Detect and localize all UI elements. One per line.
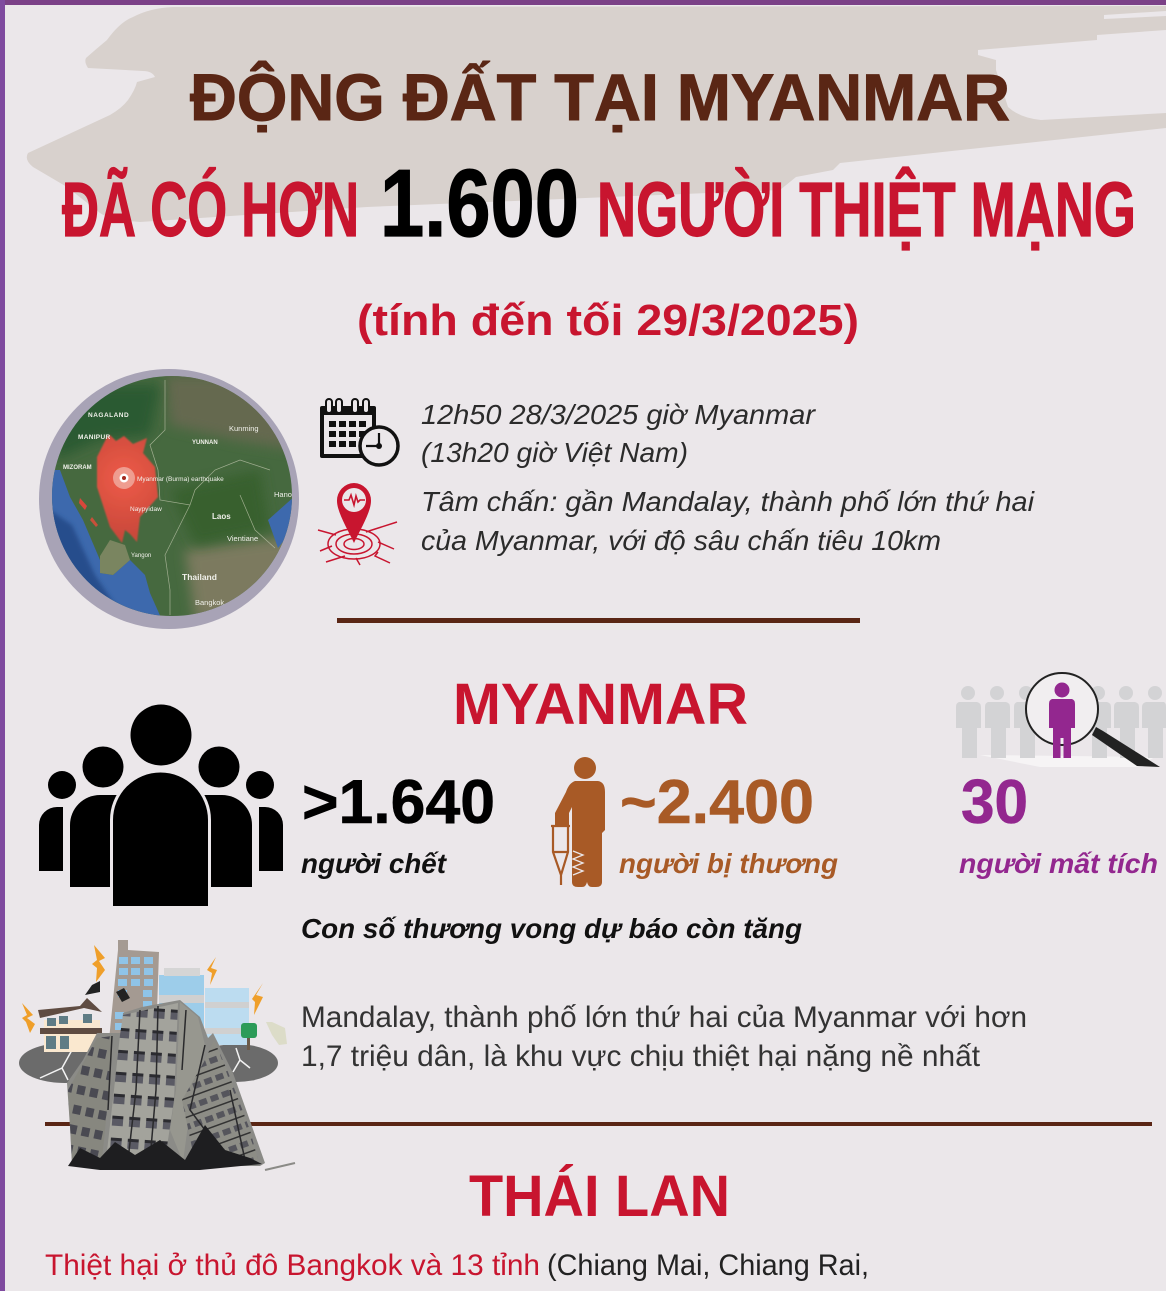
- heading: Myanmar: MYANMAR: [453, 672, 748, 737]
- tall tower: [109, 940, 159, 1040]
- text: Thailand damage: (Chiang Mai, Chiang Rai,: [547, 1249, 869, 1282]
- stat: injured: [619, 768, 838, 879]
- text: Mandalay: 1,7 triệu dân, là khu vực chịu thiệt hại nặng nề nhất: [301, 1040, 981, 1073]
- map of earthquake zone: YUNNAN: [192, 440, 218, 446]
- text: Mandalay: [301, 1001, 1027, 1073]
- text: time of quake: 12h50 28/3/2025 giờ Myanmar: [421, 399, 817, 430]
- title: ĐÃ CÓ HƠN: [62, 166, 359, 253]
- icon: calendar and clock: [320, 399, 398, 465]
- Irrawaddy delta: [100, 540, 130, 575]
- map of earthquake zone: Laos: [212, 512, 231, 521]
- stat: missing: người mất tích: [959, 848, 1158, 879]
- map of earthquake zone: Myanmar (Burma) earthquake: [137, 476, 224, 483]
- icon: epicenter pin: [318, 483, 397, 565]
- stat: deaths: [301, 768, 495, 879]
- blue buildings: [159, 975, 204, 1035]
- text: Thailand damage: Thiệt hại ở thủ đô Bangkok và 13 tỉnh: [45, 1249, 540, 1282]
- map of earthquake zone: Naypyidaw: [130, 506, 162, 513]
- map of earthquake zone: Yangon: [131, 553, 151, 559]
- stat: deaths: >1.640: [302, 768, 495, 837]
- subtitle: date: (tính đến tối 29/3/2025): [357, 296, 859, 345]
- red intensity area: [97, 435, 158, 543]
- stat: injured: ~2.400: [620, 768, 814, 837]
- title: ĐỘNG ĐẤT TẠI MYANMAR: [190, 60, 1010, 134]
- map of earthquake zone: Thailand: [182, 572, 217, 582]
- map of earthquake zone: Kunming: [229, 424, 259, 433]
- note: casualties forecast: Con số thương vong dự báo còn tăng: [301, 913, 802, 944]
- stat: missing: [959, 768, 1158, 879]
- icon: group of people: [39, 704, 283, 906]
- text: time of quake: (13h20 giờ Việt Nam): [421, 437, 688, 468]
- text: Thailand damage: [45, 1249, 869, 1282]
- text: Mandalay: Mandalay, thành phố lớn thứ hai của Myanmar với hơn: [301, 1001, 1027, 1034]
- map of earthquake zone: Hanoi: [274, 490, 294, 499]
- map of earthquake zone: [39, 369, 299, 629]
- illustration: collapsed buildings: [19, 940, 295, 1170]
- icon: injured person with crutch: [551, 757, 605, 887]
- stat: deaths: người chết: [301, 848, 448, 879]
- collapsed block: [67, 1000, 265, 1166]
- borders: [150, 380, 275, 615]
- brush stroke behind title: [27, 6, 1166, 222]
- title: 1.600: [380, 150, 579, 257]
- map of earthquake zone: NAGALAND: [88, 412, 129, 419]
- tree: [247, 1036, 250, 1050]
- text: time of quake: [421, 399, 817, 468]
- gulfs: [268, 498, 292, 548]
- text: epicenter: Tâm chấn: gần Mandalay, thành phố lớn thứ hai: [421, 486, 1035, 517]
- map of earthquake zone: MIZORAM: [63, 465, 92, 471]
- lightning: [22, 945, 263, 1033]
- stat: injured: người bị thương: [619, 848, 838, 879]
- house: [44, 1020, 100, 1052]
- title: [62, 60, 1136, 257]
- stat: missing: 30: [961, 768, 1028, 837]
- bay of Bengal: [50, 470, 162, 620]
- map of earthquake zone: Vientiane: [227, 534, 258, 543]
- map of earthquake zone: Bangkok: [195, 598, 224, 607]
- text: epicenter: [421, 486, 1035, 556]
- icon: missing person under magnifier: [956, 673, 1166, 767]
- heading: Thailand: THÁI LAN: [469, 1164, 730, 1229]
- debris scrap: [266, 1022, 287, 1045]
- map of earthquake zone: MANIPUR: [78, 434, 110, 441]
- text: epicenter: của Myanmar, với độ sâu chấn tiêu 10km: [421, 525, 941, 556]
